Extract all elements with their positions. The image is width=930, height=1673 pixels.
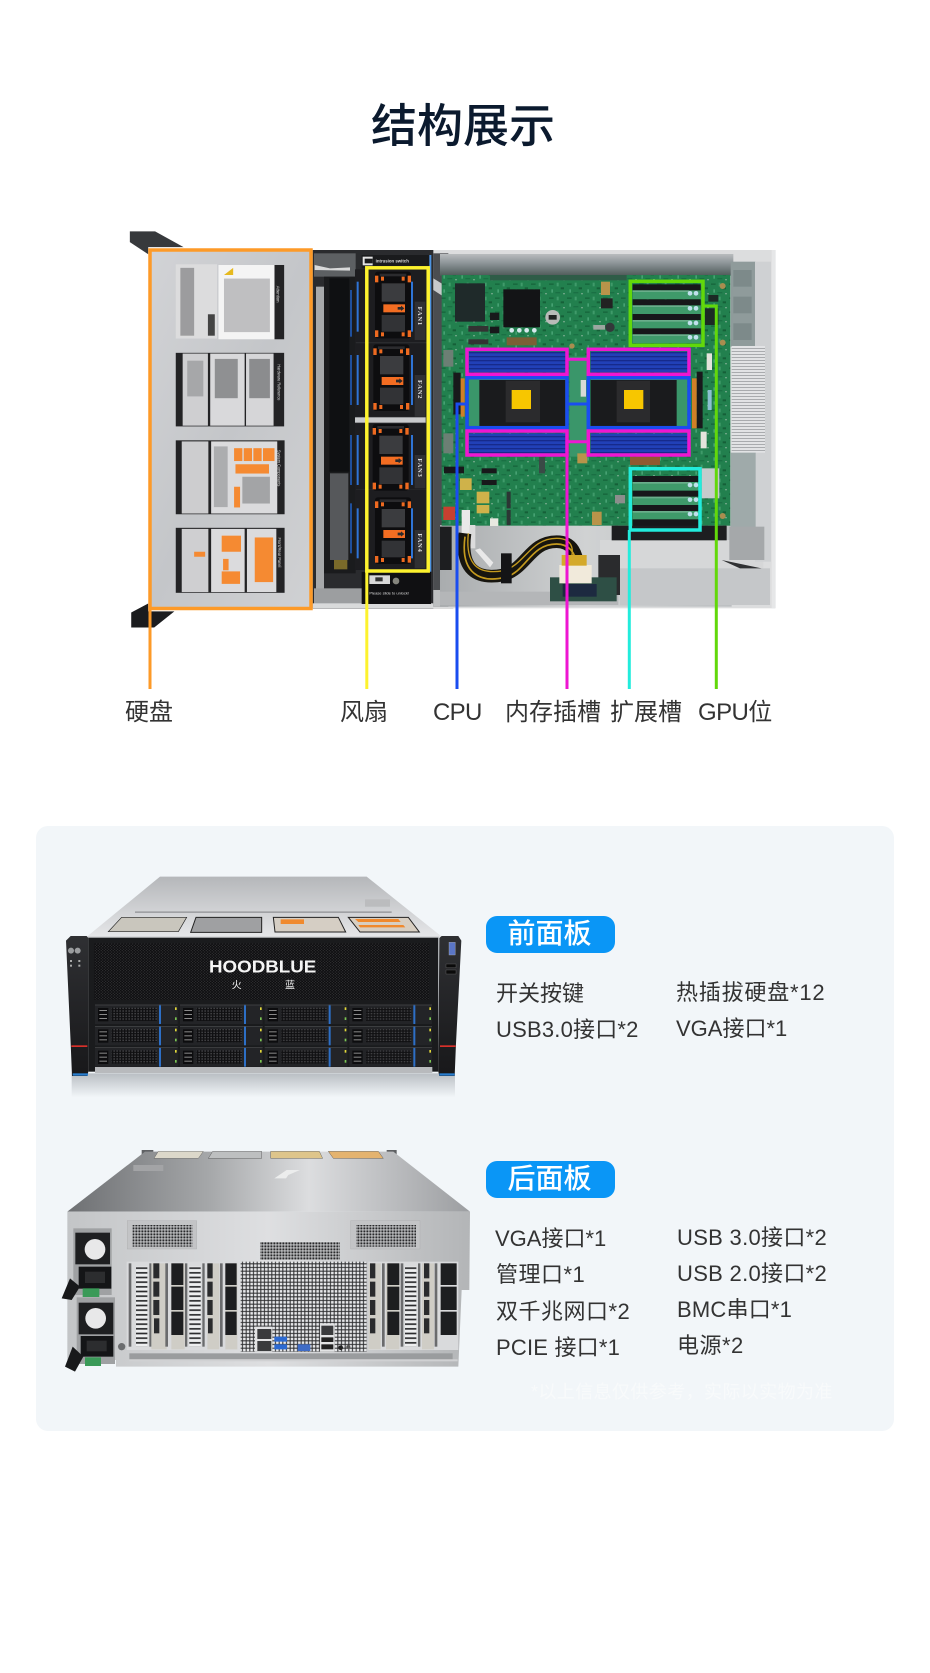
cable clip <box>501 553 512 583</box>
left cable zone <box>433 253 455 607</box>
text: 热插拔硬盘*12: 热插拔硬盘*12 <box>676 980 825 1005</box>
top stickers <box>133 1151 383 1178</box>
highlight: 扩展槽 callout <box>629 469 700 689</box>
label: 扩展槽: 扩展槽 <box>610 699 682 726</box>
heading: 后面板: 后面板 <box>507 1163 592 1194</box>
panel: front and rear background <box>36 826 894 1431</box>
text: PCIE 接口*1: PCIE 接口*1 <box>496 1335 620 1360</box>
front body <box>88 937 438 1072</box>
chassis floor <box>440 525 770 607</box>
intrusion switch <box>362 255 430 268</box>
power connector board <box>550 555 620 601</box>
highlight: GPU位 callout <box>630 281 716 689</box>
label: GPU位: GPU位 <box>698 699 772 726</box>
logo chinese: 火 <box>232 980 242 992</box>
rack ear top <box>130 231 184 254</box>
vent left <box>127 1221 197 1249</box>
black bracket under slots <box>612 526 727 540</box>
bay background <box>313 250 453 608</box>
sticker 1 <box>176 264 284 339</box>
drive cage panel <box>150 249 312 609</box>
power cables <box>464 533 578 579</box>
fans: FAN4 <box>416 533 423 553</box>
drive cage panel: Attention <box>275 286 280 303</box>
right ear <box>438 936 461 1076</box>
IO ports <box>255 1323 350 1352</box>
fans: FAN2 <box>416 380 423 399</box>
white cable bundle <box>440 510 493 570</box>
text: USB 2.0接口*2: USB 2.0接口*2 <box>677 1261 827 1286</box>
blue edge line <box>429 255 431 572</box>
PCIe left <box>127 1262 237 1350</box>
drive cage panel: Front/Rear Panel <box>277 537 282 567</box>
highlight: 风扇 callout <box>367 268 428 689</box>
bottom rail <box>129 1353 458 1361</box>
rear plate <box>67 1212 470 1367</box>
label: 风扇: 风扇 <box>340 699 388 726</box>
PSU 1 <box>62 1228 112 1300</box>
logo: HOODBLUE <box>209 957 316 977</box>
server top view: ears and drive panel <box>130 231 312 627</box>
memory modules <box>469 352 687 453</box>
fan latch plate <box>362 572 431 604</box>
left ear <box>66 936 88 1076</box>
server front view <box>66 877 461 1097</box>
label: CPU: CPU <box>433 699 482 726</box>
text: VGA接口*1: VGA接口*1 <box>676 1016 787 1041</box>
top cover <box>67 1152 470 1212</box>
top center vent <box>260 1242 340 1260</box>
logo chinese <box>232 980 295 992</box>
motherboard <box>442 275 730 526</box>
PSU 2 <box>65 1297 115 1372</box>
heading: 后面板 <box>486 1161 615 1198</box>
drive cage panel: System Components <box>277 450 282 486</box>
text: 管理口*1: 管理口*1 <box>496 1262 585 1287</box>
fans <box>355 269 427 570</box>
highlight: 内存插槽 callout <box>467 349 689 689</box>
rear side brackets <box>722 250 776 608</box>
label: 硬盘: 硬盘 <box>125 699 173 726</box>
server rear view <box>62 1150 470 1372</box>
top cover <box>86 877 443 937</box>
fan latch plate: Please slide to unlock! <box>369 590 409 595</box>
reflection <box>72 1073 455 1097</box>
chassis <box>433 250 775 608</box>
left rail and cables <box>313 253 456 608</box>
PCIe right <box>368 1262 458 1350</box>
expansion slots <box>633 476 701 526</box>
drive bays <box>95 1005 432 1067</box>
label: 内存插槽: 内存插槽 <box>505 699 601 726</box>
vent right <box>351 1221 420 1249</box>
honeycomb grill <box>94 943 429 1000</box>
text: 开关按键: 开关按键 <box>496 981 584 1006</box>
heading: 前面板: 前面板 <box>507 918 592 949</box>
logo chinese: 蓝 <box>285 980 295 992</box>
bottom lip <box>95 1067 432 1073</box>
heading: 前面板 <box>486 916 615 953</box>
title: 结构展示 <box>371 100 555 152</box>
text: USB 3.0接口*2: USB 3.0接口*2 <box>677 1225 827 1250</box>
rack ear bottom <box>131 604 174 627</box>
center mesh <box>241 1262 367 1352</box>
text: BMC串口*1: BMC串口*1 <box>677 1297 792 1322</box>
highlight: 硬盘 callout <box>150 250 311 689</box>
GPU slots <box>633 284 701 343</box>
drive cage panel: Hardware Reference <box>276 364 281 401</box>
intrusion switch: Intrusion switch <box>376 259 409 264</box>
server top view: fan bay <box>313 250 456 608</box>
PSU ground <box>118 1343 125 1350</box>
text: USB3.0接口*2: USB3.0接口*2 <box>496 1017 639 1042</box>
sticker 4 <box>176 528 285 593</box>
highlight: CPU callout <box>457 378 689 689</box>
server top view: chassis and motherboard <box>433 250 776 608</box>
sticker 3 <box>176 440 285 514</box>
sticker 2 <box>176 353 284 426</box>
note: faint disclaimer: *以上信息仅供参考，实际以实物为准 <box>531 1382 833 1402</box>
rear wall <box>440 254 733 276</box>
fans: FAN3 <box>416 458 423 478</box>
top stickers <box>108 899 419 932</box>
top brackets <box>142 1150 397 1160</box>
text: 双千兆网口*2: 双千兆网口*2 <box>496 1299 630 1324</box>
text: VGA接口*1: VGA接口*1 <box>495 1226 606 1251</box>
fans: FAN1 <box>416 307 423 326</box>
text: 电源*2: 电源*2 <box>677 1333 744 1358</box>
CPU sockets <box>469 379 687 427</box>
